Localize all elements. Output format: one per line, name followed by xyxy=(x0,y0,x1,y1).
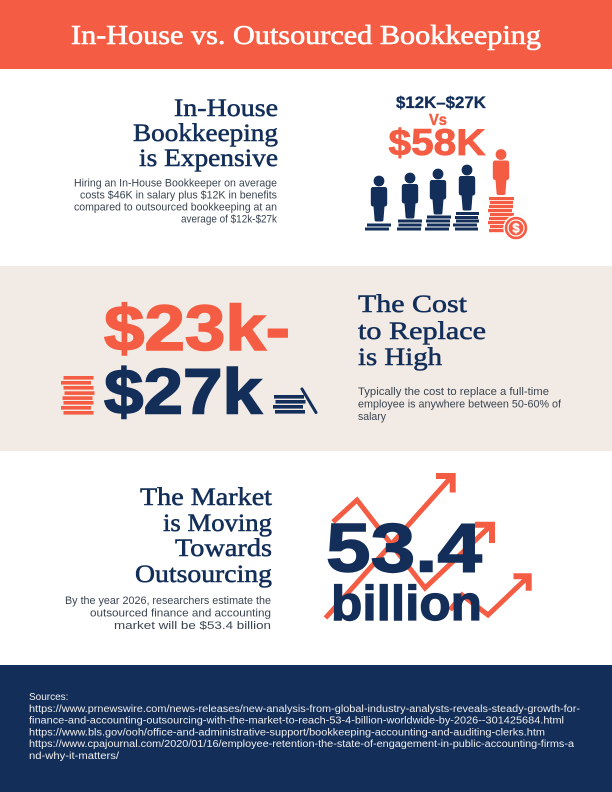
big number: 53.4: 53.4 xyxy=(326,510,482,586)
text block: source links: https://www.bls.gov/ooh/office-and-administrative-support/bookkeeping-accounting-and-auditing-clerks.htm xyxy=(29,728,545,738)
icon: people on coin stacks xyxy=(365,149,528,240)
text block: market description: market will be $53.4 billion xyxy=(114,620,271,632)
panel: sources xyxy=(0,665,612,792)
text block: in-house description: average of $12k-$27k xyxy=(181,214,278,226)
text block: market description xyxy=(65,595,271,632)
chart: rising arrows xyxy=(326,475,529,618)
text block: source links: https://www.prnewswire.com/news-releases/new-analysis-from-global-industry-analysts-reveals-steady-growth-for- xyxy=(29,704,580,715)
title: In-House vs. Outsourced Bookkeeping xyxy=(71,20,541,50)
icon: people on coin stacks: $ xyxy=(512,220,520,236)
text block: source links: finance-and-accounting-outsourcing-with-the-market-to-reach-53-4-billion-worldwide-by-2026--301425684.html xyxy=(29,716,564,726)
heading: the market is moving towards outsourcing xyxy=(135,482,272,588)
heading: the cost to replace is high: is High xyxy=(358,342,442,371)
icon: navy coin stack with bar xyxy=(273,389,316,414)
text block: replacement cost description xyxy=(358,386,561,423)
heading: the cost to replace is high: The Cost xyxy=(358,289,467,318)
big number: billion: billion xyxy=(331,577,482,631)
heading: in-house bookkeeping: is Expensive xyxy=(139,143,278,172)
heading: the market is moving towards outsourcing: The Market xyxy=(140,482,272,511)
text block: in-house description: costs $46K in salary plus $12K in benefits xyxy=(80,190,277,202)
text block: source links: Sources: xyxy=(29,692,68,703)
text block: market description: By the year 2026, researchers estimate the xyxy=(65,595,271,607)
comparison figures: Vs xyxy=(429,112,447,129)
heading: the market is moving towards outsourcing: is Moving xyxy=(163,508,272,537)
panel: market outsourcing xyxy=(0,451,612,665)
comparison figures: $12K–$27K xyxy=(396,93,487,112)
heading: in-house bookkeeping: In-House xyxy=(174,93,278,122)
heading: the market is moving towards outsourcing: Towards xyxy=(175,533,272,562)
big number: $27k: $27k xyxy=(104,356,262,428)
text block: replacement cost description: employee is anywhere between 50-60% of xyxy=(358,398,561,410)
comparison figures: $58K xyxy=(388,122,486,163)
text block: in-house description: Hiring an In-House Bookkeeper on average xyxy=(74,178,277,190)
heading: the market is moving towards outsourcing: Outsourcing xyxy=(135,559,272,588)
comparison figures xyxy=(388,93,487,163)
header banner xyxy=(0,0,612,69)
text block: in-house description: compared to outsourced bookkeeping at an xyxy=(74,202,277,214)
text block: source links: nd-why-it-matters/ xyxy=(29,751,119,762)
text block: market description: outsourced finance and accounting xyxy=(90,608,271,620)
big number: $23k-: $23k- xyxy=(104,292,290,364)
panel: in-house expense xyxy=(0,69,612,266)
icon: orange coin stack xyxy=(61,376,94,415)
text block: in-house description xyxy=(74,178,278,226)
text block: source links xyxy=(29,692,580,762)
heading: in-house bookkeeping xyxy=(133,93,278,172)
heading: in-house bookkeeping: Bookkeeping xyxy=(133,118,278,147)
heading: the cost to replace is high xyxy=(358,289,486,371)
text block: source links: https://www.cpajournal.com/2020/01/16/employee-retention-the-state-of-engagement-in-public-accounting-firms-a xyxy=(29,739,574,750)
text block: replacement cost description: salary xyxy=(358,411,387,423)
heading: the cost to replace is high: to Replace xyxy=(358,316,486,345)
panel: cost to replace xyxy=(0,266,612,451)
text block: replacement cost description: Typically the cost to replace a full-time xyxy=(358,386,549,398)
